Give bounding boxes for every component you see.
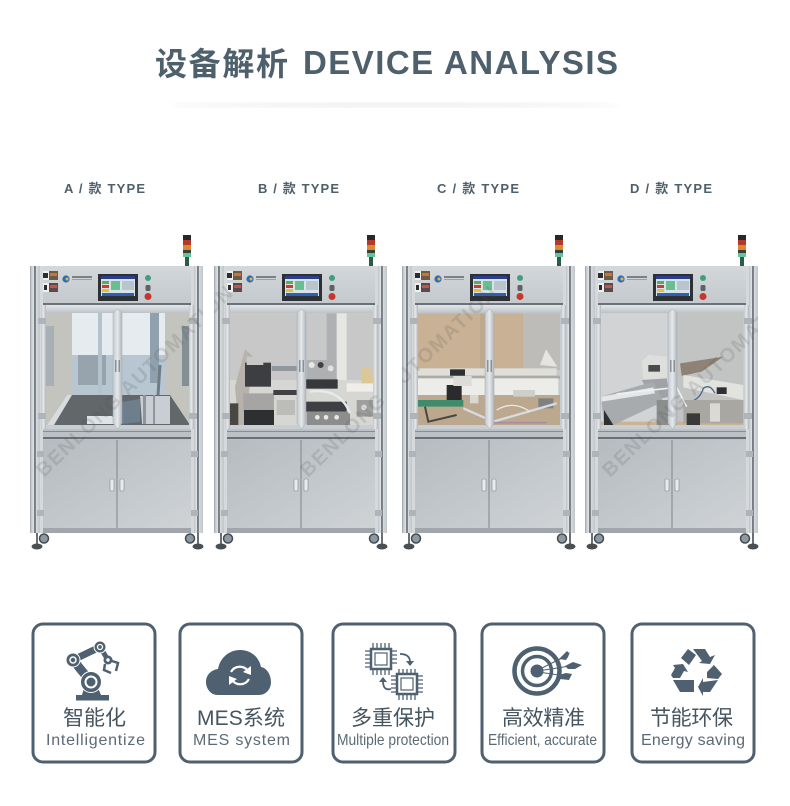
- card: intelligentize: Intelligentize: [46, 732, 145, 749]
- card: efficient accurate: 高效精准: [502, 707, 585, 730]
- label: type C: C / 款 TYPE: [437, 181, 520, 196]
- icon: target with arrows: [514, 648, 582, 694]
- card: intelligentize: [33, 624, 155, 762]
- card: multiple protection: 多重保护: [351, 707, 435, 730]
- title: 设备解析: [155, 46, 288, 82]
- icon: chips: [365, 643, 423, 700]
- card: multiple protection: [333, 624, 455, 762]
- watermark: BENLONG AUTOMATION: [32, 281, 238, 482]
- card: MES system: [180, 624, 302, 762]
- watermark: BENLONG AUTOMATION: [296, 281, 502, 482]
- title: [155, 44, 618, 82]
- machine B: [214, 235, 388, 550]
- watermark: [32, 281, 790, 482]
- title: DEVICE ANALYSIS: [303, 44, 618, 81]
- label: type D: D / 款 TYPE: [630, 181, 713, 196]
- machine A: [30, 235, 204, 550]
- label: type A: A / 款 TYPE: [64, 181, 146, 196]
- card: efficient accurate: Efficient, accurate: [488, 732, 597, 749]
- icon: cloud sync: [206, 650, 271, 695]
- card: MES system: MES系统: [197, 707, 285, 730]
- card: MES system: MES system: [193, 732, 290, 749]
- card: multiple protection: Multiple protection: [337, 732, 449, 749]
- card: efficient accurate: [482, 624, 604, 762]
- card: energy saving: 节能环保: [650, 707, 733, 730]
- machine D: [585, 235, 758, 550]
- machine C: [402, 235, 576, 550]
- icon: recycle: [671, 649, 722, 696]
- label: type B: B / 款 TYPE: [258, 181, 340, 196]
- card: energy saving: Energy saving: [641, 732, 745, 749]
- icon: robot arm: [66, 641, 118, 700]
- card: intelligentize: 智能化: [63, 707, 126, 730]
- card: energy saving: [632, 624, 754, 762]
